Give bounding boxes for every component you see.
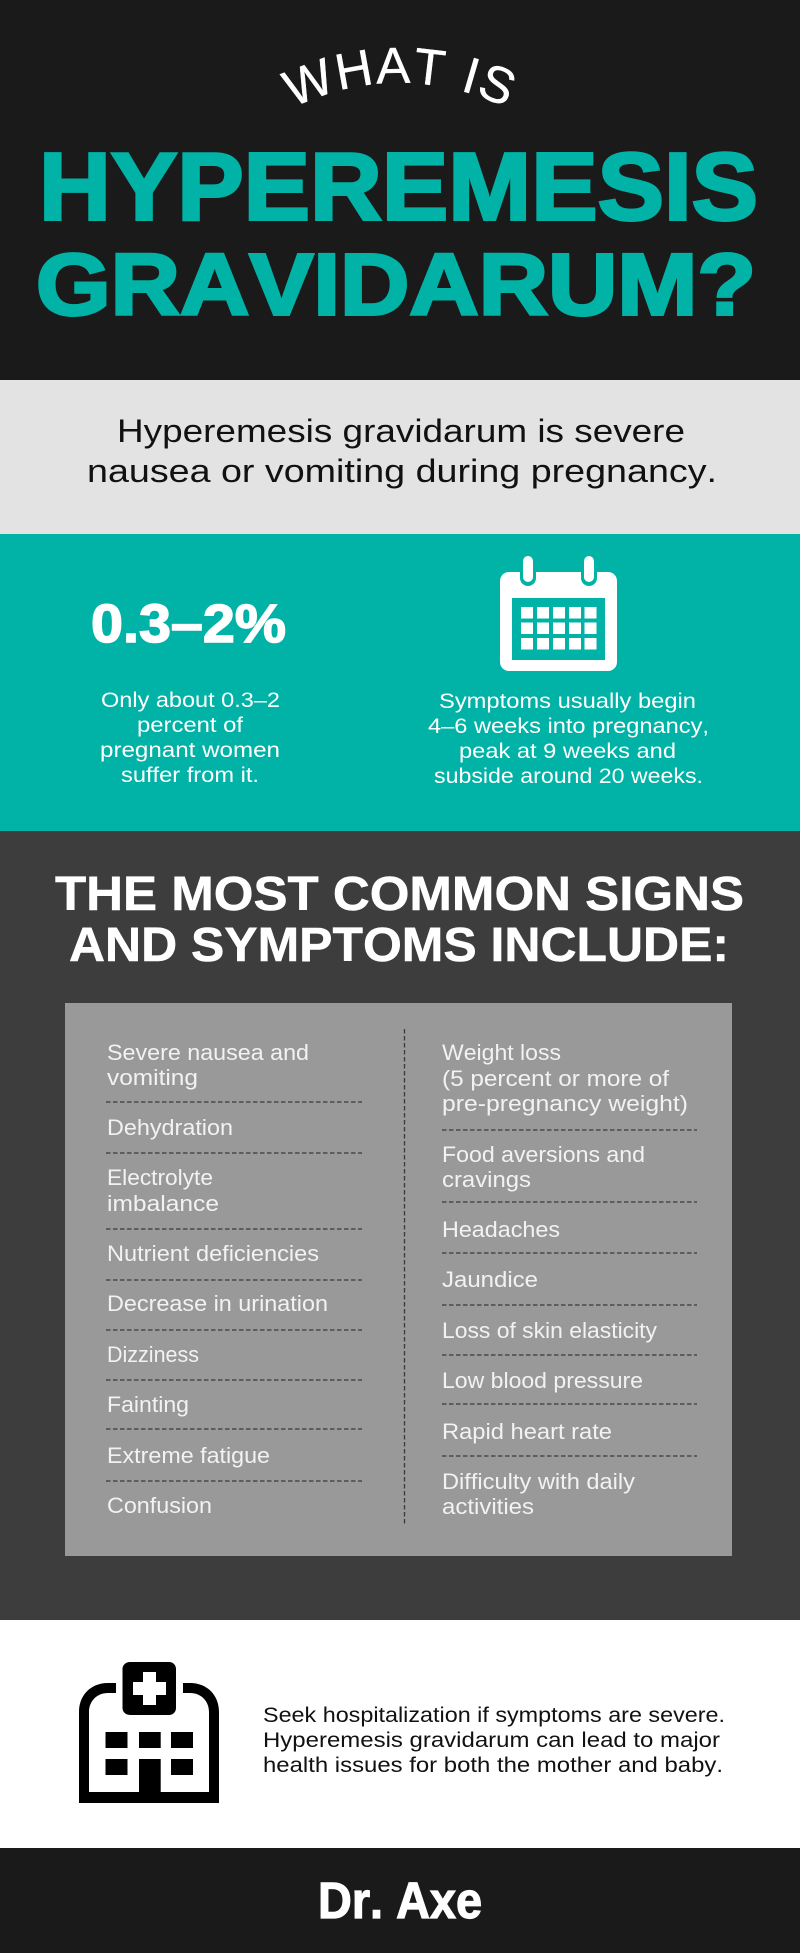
panel: hospitalization [0, 1620, 800, 1848]
list: right column: activities [442, 1494, 534, 1519]
text block: hospitalization advice [263, 1703, 725, 1777]
statistic: prevalence: 0.3–2% [91, 594, 286, 654]
list: right column: Food aversions and [442, 1142, 645, 1167]
icon: hospital [79, 1662, 219, 1803]
list: left column: Dizziness [107, 1342, 199, 1367]
list: right column [442, 1040, 697, 1519]
text block: prevalence: suffer from it. [121, 763, 259, 787]
list: left column: Confusion [107, 1493, 212, 1518]
title [36, 134, 758, 334]
text block: symptom timing: Symptoms usually begin [439, 689, 696, 713]
list: right column: (5 percent or more of [442, 1066, 670, 1091]
heading: arched What Is: WHAT IS [280, 48, 514, 104]
text block: symptom timing: peak at 9 weeks and [459, 739, 676, 763]
list: left column: Nutrient deficiencies [107, 1241, 319, 1266]
title: HYPEREMESIS [39, 134, 758, 240]
list: left column: Dehydration [107, 1115, 233, 1140]
heading: signs and symptoms [55, 868, 744, 972]
text block: hospitalization advice: health issues for both the mother and baby. [263, 1753, 723, 1777]
text block: hospitalization advice: Hyperemesis gravidarum can lead to major [263, 1728, 720, 1752]
logo: Dr. Axe: Dr. Axe [318, 1872, 482, 1929]
list: right column: Loss of skin elasticity [442, 1318, 658, 1343]
text block: symptom timing [428, 689, 709, 788]
panel: symptom list [65, 1003, 732, 1556]
list: left column: Electrolyte [107, 1165, 213, 1190]
list: left column: Extreme fatigue [107, 1443, 270, 1468]
heading: signs and symptoms: AND SYMPTOMS INCLUDE: [69, 919, 729, 972]
list: right column: Difficulty with daily [442, 1469, 636, 1494]
list: left column: Fainting [107, 1392, 189, 1417]
list: left column: Severe nausea and [107, 1040, 309, 1065]
list: right column: Rapid heart rate [442, 1419, 612, 1444]
heading: arched What Is [280, 48, 514, 104]
text block: symptom timing: subside around 20 weeks. [434, 764, 703, 788]
list: left column [106, 1040, 362, 1518]
text block: definition: nausea or vomiting during pregnancy. [87, 453, 717, 489]
panel: header [36, 48, 758, 334]
text block: definition [87, 413, 717, 489]
list: left column: imbalance [107, 1191, 219, 1216]
text block: prevalence: pregnant women [100, 738, 280, 762]
panel: statistics [0, 534, 800, 831]
text block: prevalence [100, 688, 280, 787]
title: GRAVIDARUM? [36, 236, 756, 334]
text block: definition: Hyperemesis gravidarum is severe [117, 413, 685, 449]
list: right column: Headaches [442, 1217, 560, 1242]
text block: prevalence: percent of [137, 713, 243, 737]
panel: definition [0, 380, 800, 534]
text block: hospitalization advice: Seek hospitalization if symptoms are severe. [263, 1703, 725, 1727]
icon: calendar [500, 552, 617, 671]
list: left column: vomiting [107, 1065, 198, 1090]
list: right column: Low blood pressure [442, 1368, 643, 1393]
list: right column: pre-pregnancy weight) [442, 1091, 688, 1116]
list: right column: Weight loss [442, 1040, 561, 1065]
text block: symptom timing: 4–6 weeks into pregnancy, [428, 714, 709, 738]
text block: prevalence: Only about 0.3–2 [101, 688, 280, 712]
list: right column: cravings [442, 1167, 531, 1192]
panel: footer [0, 1848, 800, 1953]
heading: signs and symptoms: THE MOST COMMON SIGNS [55, 868, 744, 921]
list: right column: Jaundice [442, 1267, 538, 1292]
list: left column: Decrease in urination [107, 1291, 328, 1316]
panel: signs and symptoms [0, 831, 800, 1620]
